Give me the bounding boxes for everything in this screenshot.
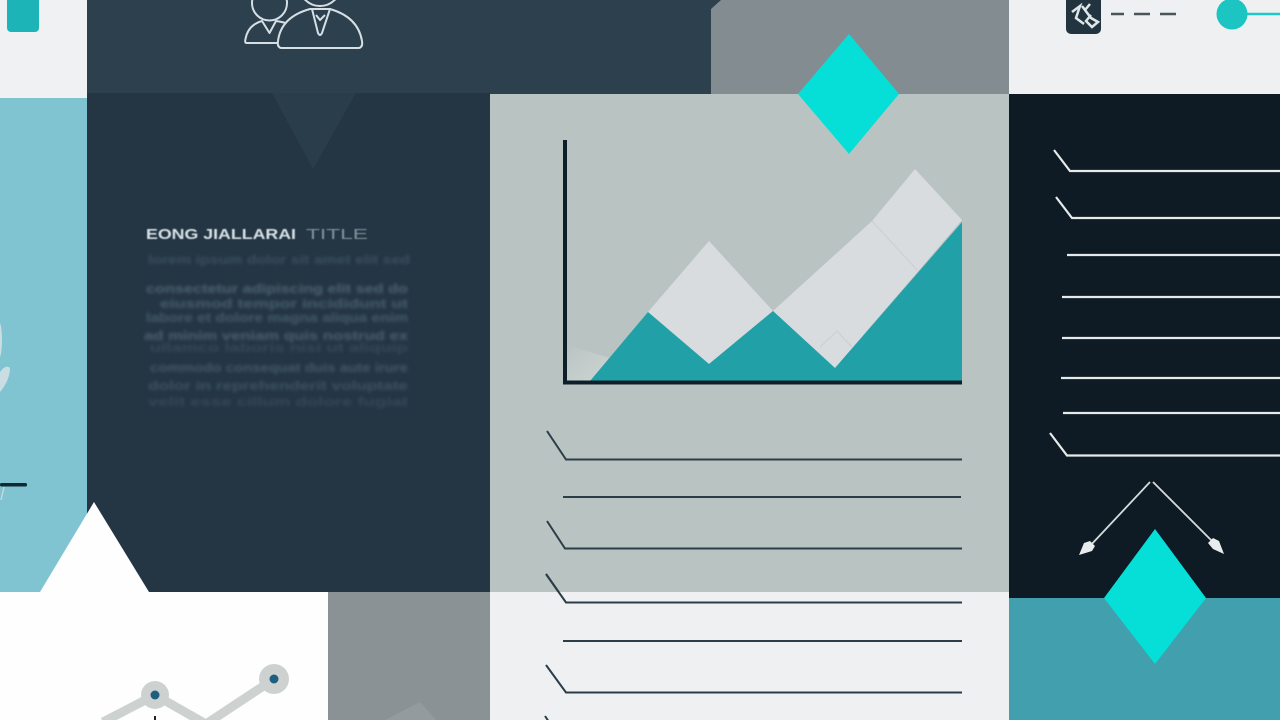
body text block: labore et dolore magna aliqua enim — [146, 310, 408, 325]
panel: right dark — [1009, 94, 1280, 598]
list lines: bottom — [545, 574, 962, 720]
diamond: top teal — [798, 34, 899, 154]
list lines: right — [1050, 150, 1280, 456]
panel: left light blue — [0, 98, 87, 592]
icon: teal tab — [7, 0, 39, 32]
diamond: bottom teal — [1104, 529, 1206, 664]
body text block: dolor in reprehenderit voluptate — [148, 378, 408, 393]
dashes — [1111, 13, 1176, 15]
panel: bottom gray block — [328, 592, 490, 720]
axes — [565, 140, 962, 382]
body text block: eiusmod tempor incididunt ut — [160, 296, 409, 311]
heading: EONG JIALLARAI — [146, 226, 296, 243]
panel: bottom-left white — [0, 502, 328, 720]
panel: top gray block — [711, 0, 1009, 94]
panel: top-right white — [1009, 0, 1280, 94]
white triangle — [40, 502, 149, 592]
body text block: consectetur adipiscing elit sed do — [146, 281, 408, 296]
icon: two people — [245, 0, 362, 48]
body text block: velit esse cillum dolore fugiat — [148, 394, 409, 409]
panel: bottom-centre white — [490, 574, 1009, 720]
panel: dark text panel — [87, 93, 490, 592]
arrows: chevron pair — [1079, 482, 1224, 555]
white peak: left — [648, 241, 773, 364]
line chart — [103, 664, 289, 720]
faint triangle pointer — [272, 93, 356, 169]
area chart — [565, 140, 962, 382]
panel: top-left white — [0, 0, 87, 98]
teal area — [590, 222, 962, 381]
heading: TITLE — [306, 226, 368, 243]
body text block: ad minim veniam quis nostrud ex — [144, 328, 409, 343]
body text block: ullamco laboris nisi ut aliquip — [150, 340, 408, 355]
body text block: commodo consequat duis aute irure — [150, 360, 408, 375]
body text block — [144, 252, 410, 409]
panel: top dark band — [87, 0, 723, 94]
body text block: lorem ipsum dolor sit amet elit sed — [148, 252, 410, 267]
panel: bottom-right teal — [1009, 598, 1280, 720]
white peak: right — [773, 169, 962, 368]
icon: small dark bar — [0, 483, 27, 500]
icon: teal node — [1216, 0, 1280, 30]
heading — [146, 226, 368, 243]
icon: dark rounded square — [1066, 0, 1101, 34]
list lines: centre — [546, 431, 962, 602]
panel: centre gray with chart — [490, 94, 1009, 602]
icon: partial hand figure — [0, 322, 10, 392]
